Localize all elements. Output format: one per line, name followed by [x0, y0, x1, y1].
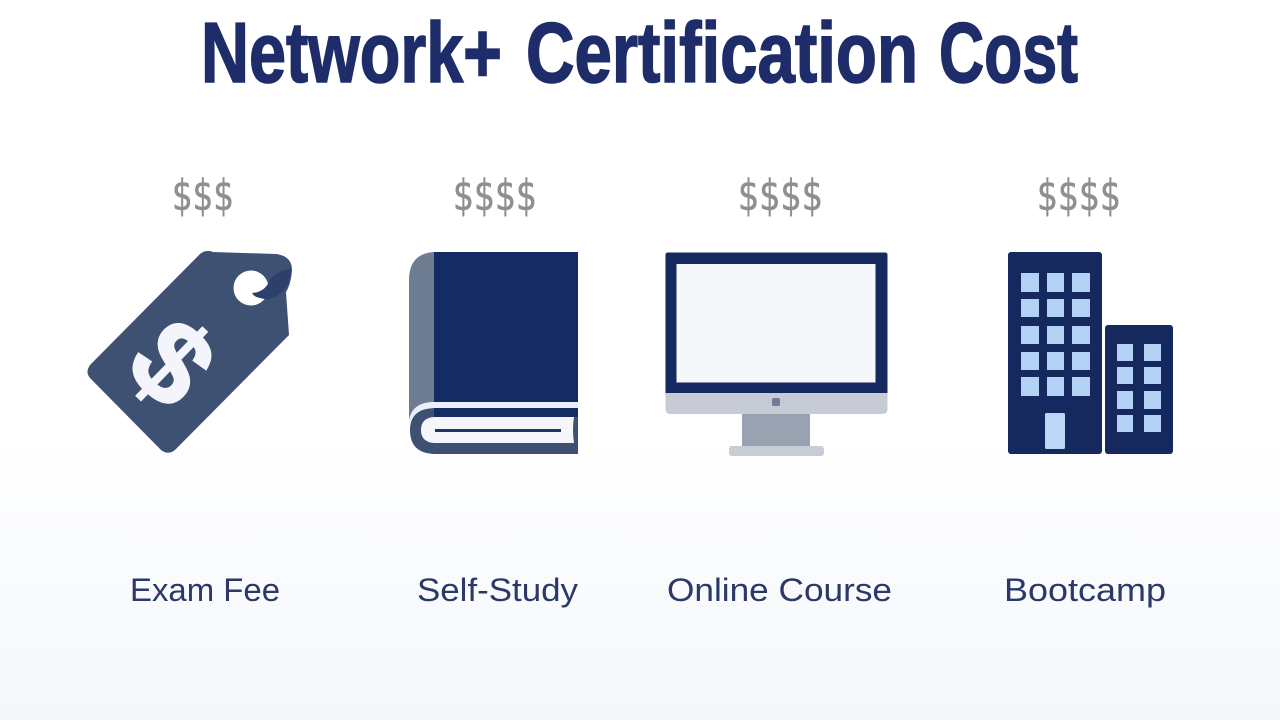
- icon: monitor: [666, 252, 888, 456]
- title: Network+: [201, 6, 502, 101]
- label: bootcamp: Bootcamp: [1004, 572, 1166, 608]
- icon: price tag: [88, 251, 292, 453]
- icon: price tag: $: [104, 294, 241, 432]
- price: exam fee: $$$: [172, 171, 234, 221]
- price: online course: $$$$: [738, 171, 823, 221]
- label: exam fee: Exam Fee: [130, 572, 280, 608]
- label: online course: Online Course: [667, 572, 892, 608]
- price: bootcamp: $$$$: [1037, 171, 1121, 221]
- label: self-study: Self-Study: [417, 572, 578, 608]
- icon: book: [409, 252, 578, 454]
- title: Certification: [526, 6, 918, 101]
- column: bootcamp: [1004, 171, 1173, 608]
- column: exam fee: [88, 171, 292, 608]
- title: Cost: [939, 6, 1078, 101]
- icon: office buildings: [1008, 252, 1173, 454]
- column: online course: [666, 171, 892, 608]
- price: self-study: $$$$: [453, 171, 537, 221]
- column: self-study: [409, 171, 578, 608]
- title: [201, 6, 1078, 101]
